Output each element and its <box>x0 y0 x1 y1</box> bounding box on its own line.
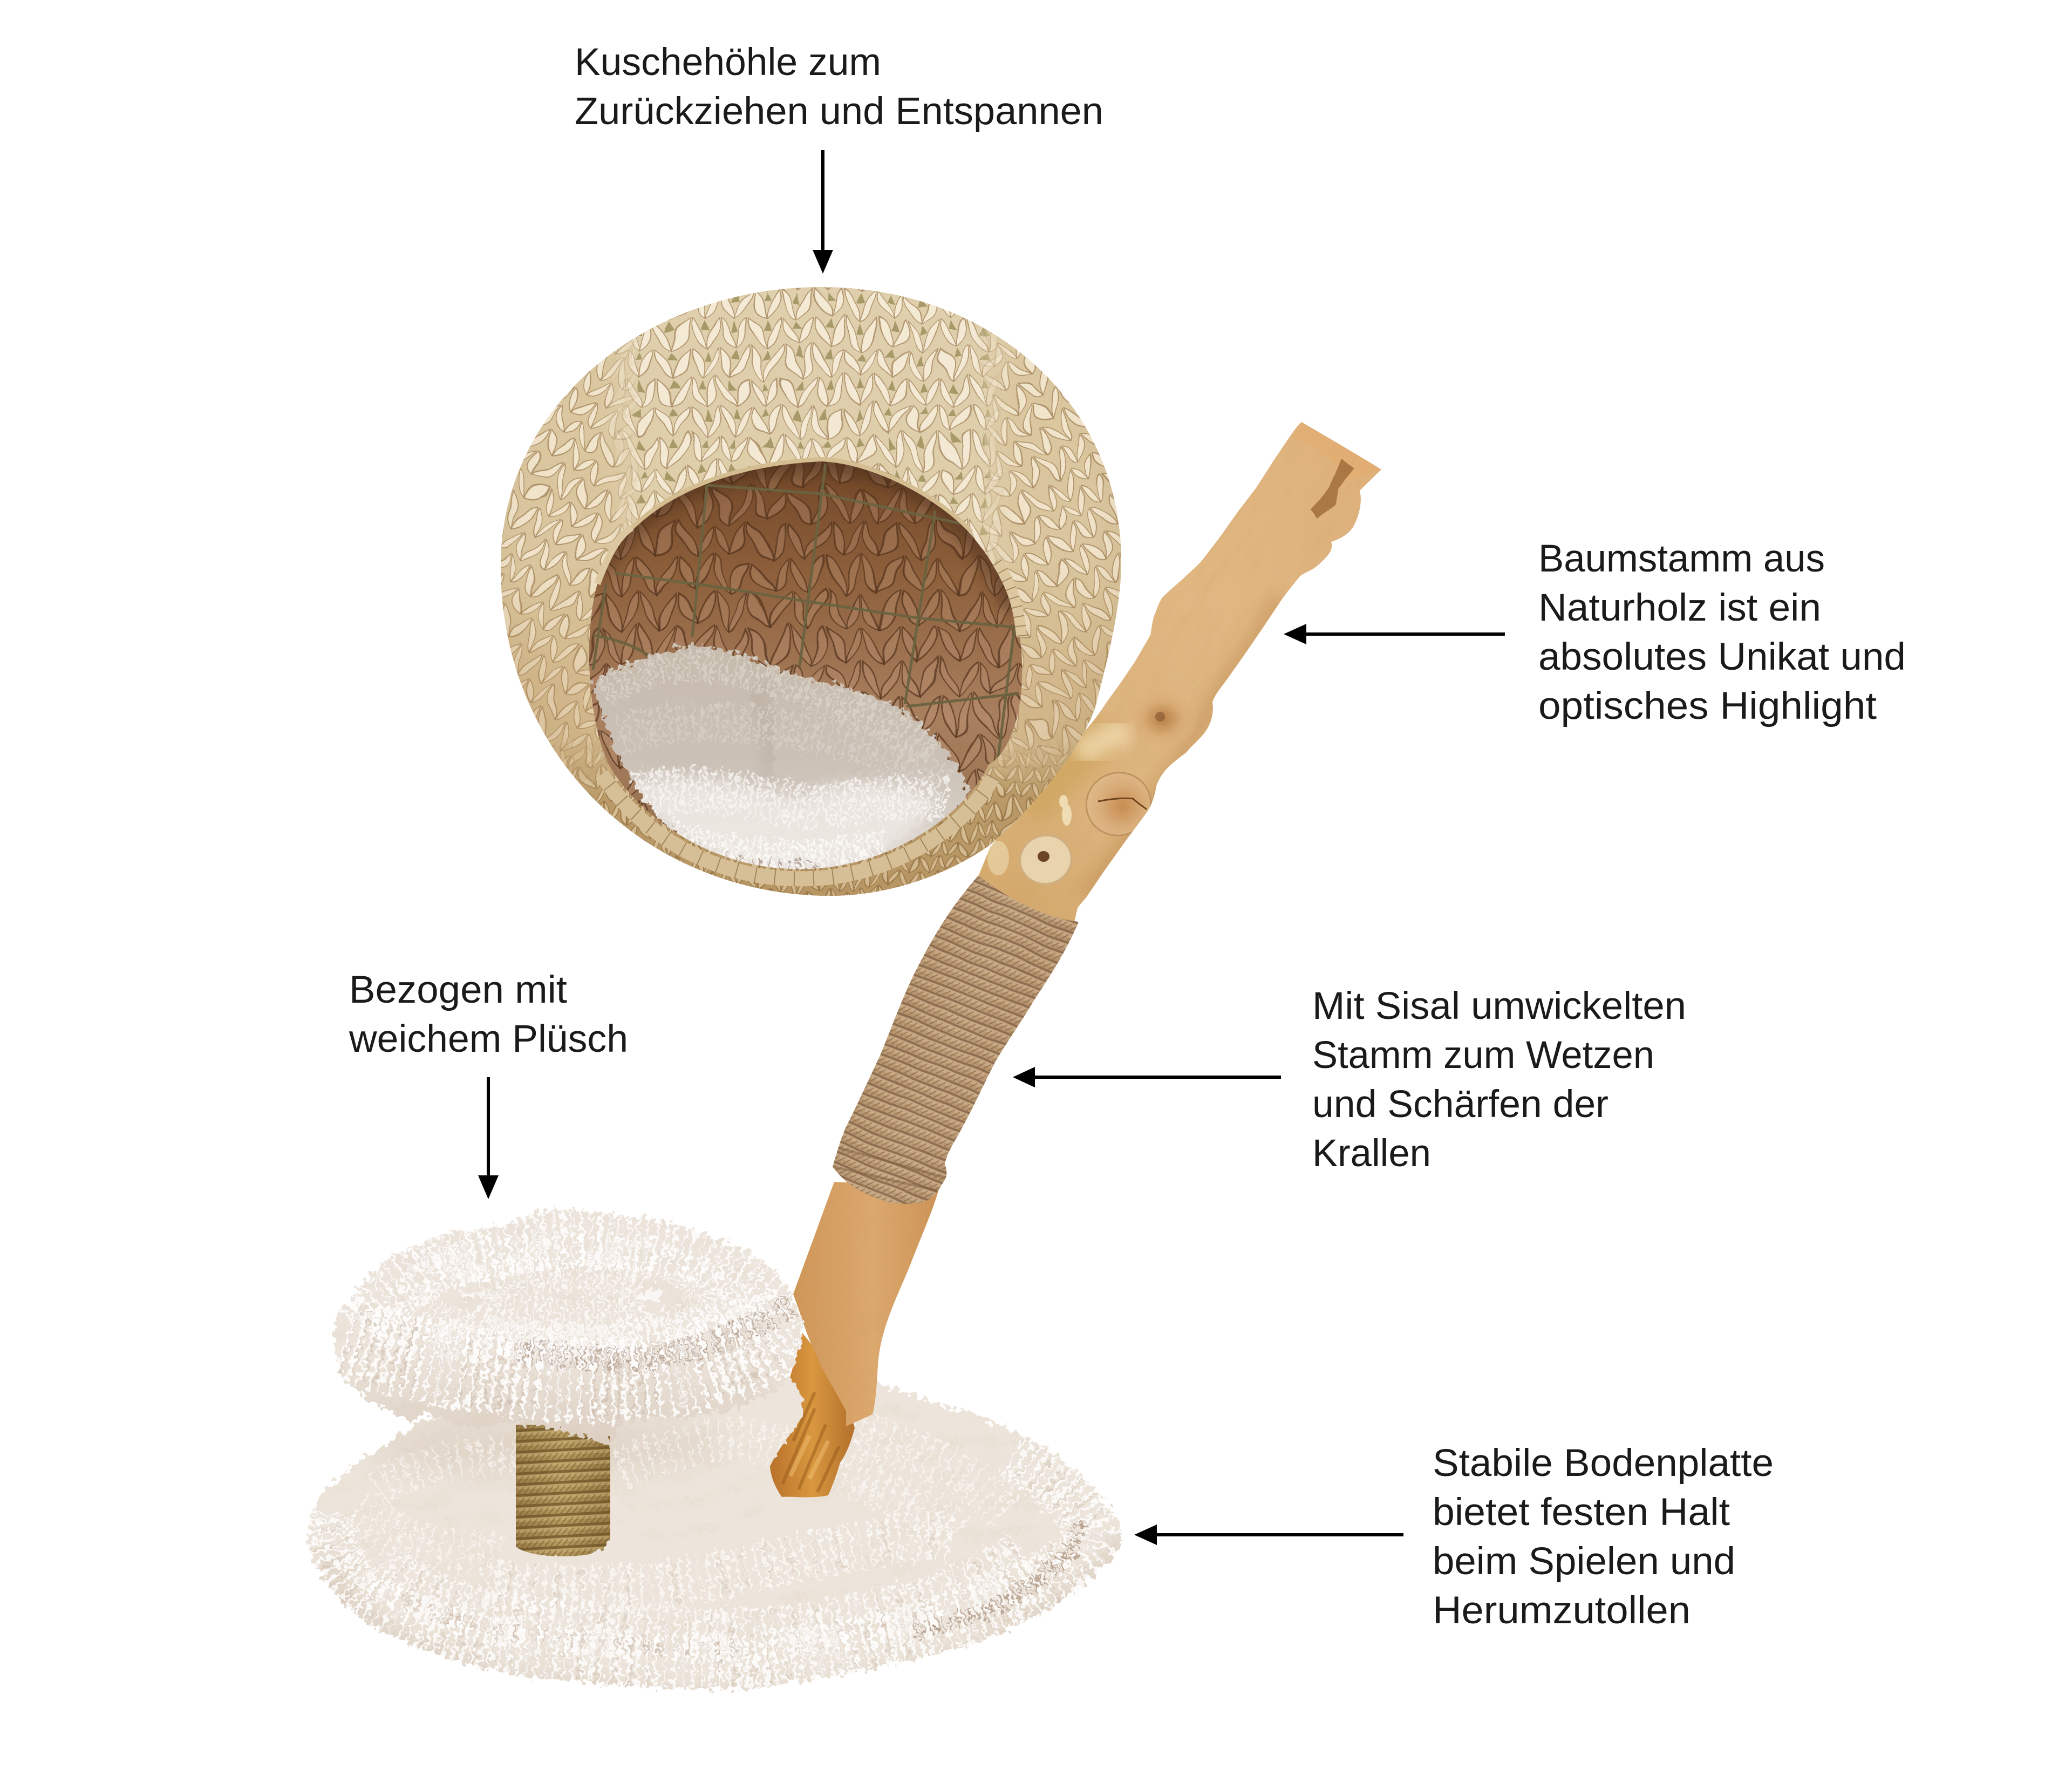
label: Bodenplatte: Herumzutollen <box>1433 1589 1691 1632</box>
sisal wrap on trunk <box>815 858 1095 1220</box>
basket interior <box>577 453 1031 890</box>
label: Kuschehöhle: Kuschehöhle zum <box>575 41 881 84</box>
knot: middle <box>1133 691 1198 747</box>
illustration: cat tree <box>305 254 1381 1693</box>
knot: large <box>1078 764 1160 845</box>
rim accents: base <box>404 1525 1078 1649</box>
label: Sisal <box>1312 985 1686 1175</box>
base fur in front of post and foot <box>555 1371 805 1556</box>
branch highlight: pale wood <box>1079 729 1128 756</box>
fur strands: cushion <box>604 664 950 867</box>
arrow: to branch <box>1284 624 1505 644</box>
label: Sisal: Stamm zum Wetzen <box>1312 1034 1654 1077</box>
label: Sisal: und Schärfen der <box>1312 1083 1608 1126</box>
label: Bodenplatte <box>1433 1442 1774 1632</box>
cushion inside basket <box>583 637 977 890</box>
wire grid <box>593 464 1019 766</box>
label: Plüsch <box>349 969 628 1060</box>
label: Plüsch: weichem Plüsch <box>349 1018 628 1060</box>
base plate: plush disc <box>291 1371 1133 1700</box>
branch shading: right side <box>1086 599 1282 897</box>
upper branch: natural wood <box>860 288 1514 1061</box>
branch tip: dark bark patch <box>1310 459 1354 519</box>
label: Baumstamm: absolutes Unikat und <box>1538 636 1906 678</box>
branch highlight: golden area <box>1025 729 1106 809</box>
label: Baumstamm: Baumstamm aus <box>1538 537 1825 580</box>
arrow: to base <box>1134 1525 1403 1545</box>
label: Baumstamm: Naturholz ist ein <box>1538 587 1821 629</box>
label: Sisal: Krallen <box>1312 1132 1431 1175</box>
label: Kuschehöhle: Zurückziehen und Entspannen <box>575 90 1103 133</box>
label: Bodenplatte: Stabile Bodenplatte <box>1433 1442 1774 1485</box>
fur rings: platform <box>345 1239 796 1382</box>
basket bottom rim <box>597 459 1021 879</box>
basket: woven sphere <box>486 270 1133 917</box>
label: Kuschehöhle <box>575 41 1103 133</box>
trunk foot: lower wood piece <box>770 1333 855 1498</box>
label: Baumstamm <box>1538 537 1906 727</box>
label: Bodenplatte: bietet festen Halt <box>1433 1491 1730 1534</box>
upper platform: plush top <box>324 1198 815 1452</box>
post: sisal wrapped support <box>516 1425 610 1556</box>
label: Plüsch: Bezogen mit <box>349 969 567 1011</box>
label: Sisal: Mit Sisal umwickelten <box>1312 985 1686 1028</box>
arrow: to sisal <box>1013 1067 1281 1087</box>
knot: small pale <box>1014 829 1077 890</box>
label: Baumstamm: optisches Highlight <box>1538 685 1877 727</box>
pale nubs <box>987 795 1072 875</box>
arrow: to platform <box>478 1077 499 1199</box>
arrow: to basket <box>813 150 833 274</box>
label: Bodenplatte: beim Spielen und <box>1433 1540 1735 1583</box>
branch end face <box>1292 422 1381 480</box>
trunk: lower bare wood <box>793 1182 939 1426</box>
